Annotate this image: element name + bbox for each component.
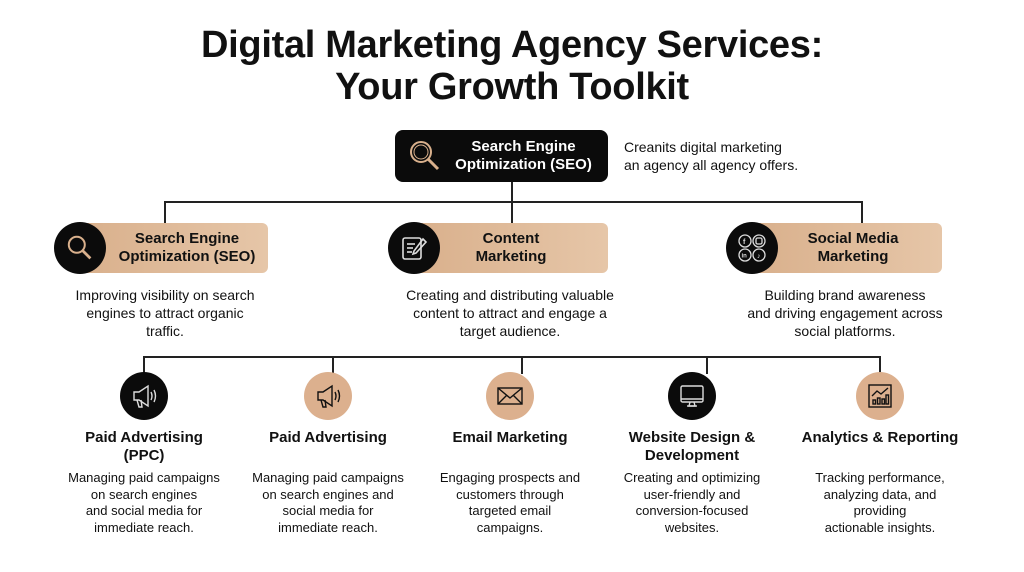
top note: an agency all agency offers. bbox=[624, 157, 798, 173]
top node: SEO bbox=[395, 130, 608, 182]
icon: social: in bbox=[742, 254, 747, 260]
service: Email Marketing bbox=[440, 372, 580, 534]
icon: social bbox=[726, 222, 778, 274]
text: content desc: Creating and distributing valuable bbox=[406, 287, 614, 303]
panel: Social Media Marketing bbox=[726, 222, 942, 274]
panel: Content Marketing: Content bbox=[483, 230, 539, 247]
panel: SEO: Optimization (SEO) bbox=[119, 248, 255, 265]
panel: SEO bbox=[54, 222, 268, 274]
service: Website Design & Development: Development bbox=[645, 447, 739, 464]
text: SEO desc bbox=[76, 287, 254, 339]
text: social desc bbox=[747, 287, 943, 339]
service: Website Design & Development bbox=[624, 372, 760, 534]
top note bbox=[624, 139, 798, 173]
top node: SEO: Search Engine bbox=[471, 138, 576, 155]
icon: document pen bbox=[388, 222, 440, 274]
text: SEO desc: Improving visibility on search bbox=[76, 287, 254, 303]
service: Paid Advertising (PPC): Paid Advertising bbox=[85, 429, 203, 446]
service: Analytics & Reporting: Tracking performance, bbox=[815, 470, 945, 485]
service: Website Design & Development: Creating and optimizing bbox=[624, 470, 760, 485]
service: Analytics & Reporting: analyzing data, and bbox=[824, 486, 936, 502]
service: Analytics & Reporting: actionable insights. bbox=[825, 520, 935, 534]
service: Email Marketing: campaigns. bbox=[477, 520, 543, 534]
service: Paid Advertising (PPC): and social media for bbox=[86, 503, 202, 518]
service: Email Marketing: Email Marketing bbox=[452, 429, 568, 446]
top note: Creanits digital marketing bbox=[624, 139, 782, 155]
service: Paid Advertising: social media for bbox=[282, 503, 374, 518]
service: Paid Advertising bbox=[252, 372, 404, 534]
service: Website Design & Development: Website Design & bbox=[629, 429, 755, 446]
text: SEO desc: engines to attract organic bbox=[86, 305, 244, 321]
icon: envelope bbox=[486, 372, 534, 420]
title bbox=[201, 24, 823, 108]
text: content desc bbox=[406, 287, 614, 339]
service: Paid Advertising (PPC): Managing paid campaigns bbox=[68, 470, 220, 485]
text: content desc: target audience. bbox=[460, 323, 560, 339]
service: Paid Advertising: Managing paid campaigns bbox=[252, 470, 404, 485]
service: Email Marketing: targeted email bbox=[469, 503, 551, 518]
service: Paid Advertising (PPC): (PPC) bbox=[124, 447, 164, 464]
text: content desc: content to attract and engage a bbox=[413, 305, 607, 321]
text: social desc: social platforms. bbox=[794, 323, 896, 339]
panel: Content Marketing bbox=[388, 222, 608, 274]
icon: social: f bbox=[743, 239, 746, 246]
service: Analytics & Reporting: Analytics & Reporting bbox=[802, 429, 958, 446]
text: SEO desc: traffic. bbox=[146, 323, 184, 339]
text: social desc: and driving engagement across bbox=[747, 305, 943, 321]
icon: monitor bbox=[668, 372, 716, 420]
panel: Social Media Marketing: Social Media bbox=[808, 230, 898, 247]
service: Analytics & Reporting: providing bbox=[854, 503, 906, 518]
text: social desc: Building brand awareness bbox=[764, 287, 926, 303]
icon: social: ♪ bbox=[757, 253, 760, 260]
title: Your Growth Toolkit bbox=[335, 66, 689, 108]
icon: magnifier bbox=[410, 141, 439, 170]
icon: magnifier bbox=[54, 222, 106, 274]
title: Digital Marketing Agency Services: bbox=[201, 24, 823, 66]
service: Paid Advertising (PPC): on search engines bbox=[91, 486, 197, 502]
service: Paid Advertising (PPC): immediate reach. bbox=[94, 520, 194, 534]
icon: megaphone tan bbox=[304, 372, 352, 420]
icon: megaphone black bbox=[120, 372, 168, 420]
service: Paid Advertising (PPC) bbox=[68, 372, 220, 534]
panel: SEO: Search Engine bbox=[135, 230, 239, 247]
service: Paid Advertising: on search engines and bbox=[262, 486, 394, 502]
service: Paid Advertising: immediate reach. bbox=[278, 520, 378, 534]
service: Analytics & Reporting bbox=[802, 372, 958, 534]
service: Paid Advertising: Paid Advertising bbox=[269, 429, 387, 446]
service: Website Design & Development: websites. bbox=[665, 520, 719, 534]
service: Website Design & Development: user-friendly and bbox=[644, 486, 740, 502]
service: Email Marketing: customers through bbox=[456, 486, 564, 502]
service: Email Marketing: Engaging prospects and bbox=[440, 470, 580, 485]
panel: Social Media Marketing: Marketing bbox=[818, 248, 888, 265]
icon: chart bbox=[856, 372, 904, 420]
top node: SEO: Optimization (SEO) bbox=[455, 156, 592, 173]
service: Website Design & Development: conversion-focused bbox=[636, 503, 748, 518]
panel: Content Marketing: Marketing bbox=[476, 248, 546, 265]
